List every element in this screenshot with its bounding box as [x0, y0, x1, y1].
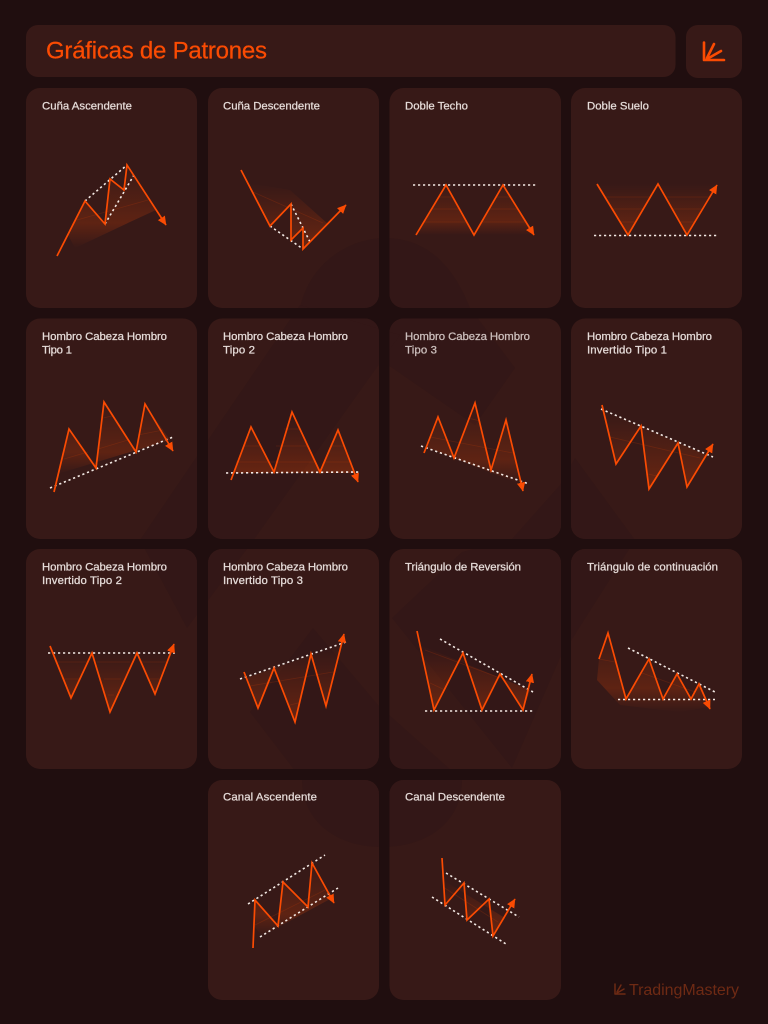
panel: Doble Techo [405, 100, 537, 235]
panel: Hombro Cabeza Hombro Invertido Tipo 3: Invertido Tipo 3 [223, 575, 303, 587]
panel: Hombro Cabeza Hombro Tipo 1 [42, 331, 173, 492]
heading: Canal Descendente [405, 792, 505, 804]
chart: head and shoulders 2 [226, 412, 361, 482]
heading: Triángulo de continuación [587, 562, 718, 574]
heading: Doble Techo [405, 100, 468, 112]
heading: Cuña Descendente [223, 100, 320, 112]
icon: logo rays [704, 42, 724, 60]
chart: rising wedge [57, 165, 166, 256]
panel: Hombro Cabeza Hombro Tipo 2: Tipo 2 [223, 344, 255, 356]
title: Gráficas de Patrones [46, 38, 267, 64]
panel: Hombro Cabeza Hombro Invertido Tipo 2 [42, 562, 175, 712]
heading: Canal Ascendente [223, 792, 317, 804]
heading: Doble Suelo [587, 100, 649, 112]
heading: Triángulo de Reversión [405, 562, 521, 574]
panel: Canal Ascendente [223, 792, 338, 948]
panel: Hombro Cabeza Hombro Tipo 3: Tipo 3 [405, 344, 437, 356]
panel: Triángulo de continuación [587, 562, 718, 712]
heading: Hombro Cabeza Hombro [42, 331, 167, 343]
heading: Cuña Ascendente [42, 100, 132, 112]
panel: Hombro Cabeza Hombro Invertido Tipo 1: Invertido Tipo 1 [587, 344, 667, 356]
panel: Triángulo de Reversión [405, 562, 533, 711]
chart: inverse head and shoulders 3 [240, 634, 346, 722]
panel: Hombro Cabeza Hombro Invertido Tipo 1 [587, 331, 713, 489]
heading: Hombro Cabeza Hombro [405, 331, 530, 343]
chart: head and shoulders 1 [50, 402, 173, 492]
chart: double bottom [594, 184, 719, 236]
chart: double top [413, 185, 537, 235]
panel: Hombro Cabeza Hombro Tipo 2 [223, 331, 361, 482]
brand name: TradingMastery [629, 982, 739, 999]
panel: Cuña Ascendente [42, 100, 166, 256]
chart: ascending channel [248, 855, 338, 948]
panel: Hombro Cabeza Hombro Invertido Tipo 2: Invertido Tipo 2 [42, 575, 122, 587]
panel: Cuña Descendente [223, 100, 346, 249]
heading: Hombro Cabeza Hombro [42, 562, 167, 574]
chart: falling wedge [241, 170, 346, 249]
chart: inverse head and shoulders 1 [601, 405, 713, 489]
footer brand [615, 982, 739, 999]
chart: continuation triangle [597, 633, 715, 712]
logo box [686, 25, 742, 78]
heading: Hombro Cabeza Hombro [223, 331, 348, 343]
panel: Hombro Cabeza Hombro Tipo 3 [405, 331, 530, 491]
icon: small logo [615, 984, 625, 994]
panel: Doble Suelo [587, 100, 719, 236]
header bar [26, 25, 676, 77]
chart: inverse head and shoulders 2 [48, 644, 175, 712]
chart: descending channel [432, 858, 519, 944]
panel: Canal Descendente [405, 792, 519, 944]
chart: head and shoulders 3 [421, 403, 529, 491]
heading: Hombro Cabeza Hombro [587, 331, 712, 343]
panel: Hombro Cabeza Hombro Invertido Tipo 3 [223, 562, 348, 722]
heading: Hombro Cabeza Hombro [223, 562, 348, 574]
panel: Hombro Cabeza Hombro Tipo 1: Tipo 1 [42, 344, 72, 356]
chart: reversal triangle [417, 631, 533, 711]
